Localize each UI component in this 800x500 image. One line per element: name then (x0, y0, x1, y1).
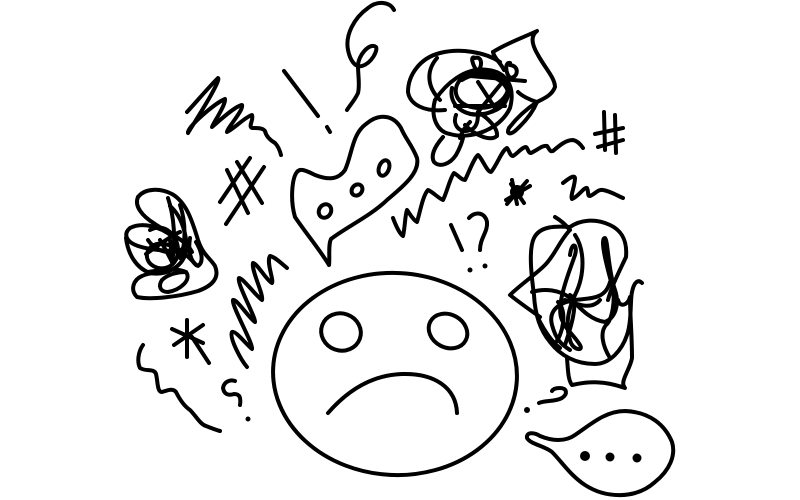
interrobang marks (451, 213, 488, 272)
squiggle: number six (347, 3, 394, 110)
scribble ball: left (126, 190, 216, 298)
asterisk: lower left (172, 320, 209, 363)
scribble ball: top (408, 31, 555, 165)
hash mark: left (220, 158, 264, 224)
speech bubble: ellipsis (527, 411, 673, 495)
squiggle: question mark right (524, 388, 566, 413)
exclamation mark: top (284, 71, 330, 132)
sad face (268, 267, 522, 481)
scribble ball: right (510, 217, 642, 388)
speech bubble: three dots (292, 117, 417, 265)
squiggle: long wave (393, 140, 583, 236)
scribble: top-left zigzag (187, 78, 281, 155)
zigzag: lower left (232, 256, 287, 367)
squiggle: small (563, 177, 623, 199)
question mark: lower left (223, 380, 250, 422)
asterisk blob (506, 180, 530, 204)
hash mark: right (595, 112, 623, 153)
squiggle: lower left wave (138, 345, 220, 431)
